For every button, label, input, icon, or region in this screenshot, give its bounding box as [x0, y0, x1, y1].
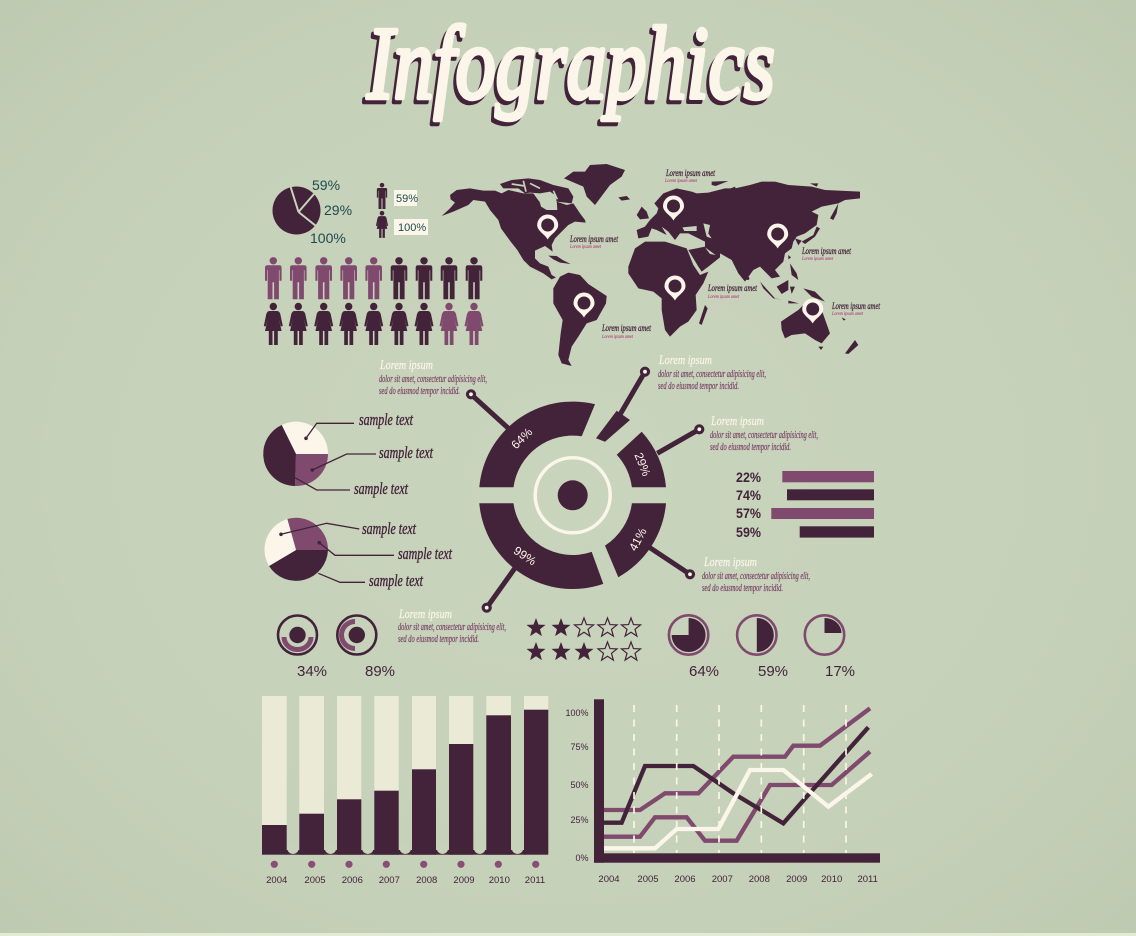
- bar values: [262, 710, 548, 855]
- callout text: top left: sed do eiusmod tempor incidid.: [379, 386, 460, 397]
- radial donut chart: 29%: [632, 451, 654, 478]
- bar year labels: 2009: [453, 875, 475, 886]
- bar year labels: 2010: [489, 875, 510, 886]
- horizontal bar chart: 57%: [736, 505, 761, 521]
- legend: man and woman percentages: [376, 183, 428, 238]
- pie chart: sample text two: sample text: [369, 571, 423, 590]
- gauge: 34%: [278, 616, 327, 680]
- gauge: 64%: 64%: [689, 663, 719, 680]
- y-axis labels: [565, 708, 588, 863]
- y-axis labels: 0%: [575, 853, 588, 863]
- gauge: 59%: 59%: [758, 663, 788, 680]
- callout text: lower left: [398, 606, 506, 645]
- bar backgrounds: [262, 696, 548, 826]
- map: americas and greenland: [442, 164, 630, 366]
- horizontal bar chart: 22%: [736, 469, 761, 485]
- x-axis year labels: 2010: [821, 874, 842, 885]
- bar dots: [271, 861, 539, 868]
- pie chart: top left with percentages: [272, 177, 352, 246]
- gauge: 34%: 34%: [297, 663, 327, 680]
- map labels: Lorem ipsum amet: [801, 246, 851, 256]
- line chart: [565, 699, 880, 885]
- bar year labels: 2005: [304, 875, 326, 886]
- y-axis labels: 75%: [570, 742, 588, 752]
- map labels: Lorem ipsum amet: [707, 283, 757, 293]
- pie chart: sample text one: sample text: [359, 410, 413, 429]
- map labels: Lorem ipsum amet: [569, 234, 618, 244]
- pointer end dots: [468, 368, 703, 611]
- donut pointers: [471, 372, 699, 608]
- y-axis labels: 25%: [570, 815, 588, 825]
- callout text: right: Lorem ipsum: [710, 413, 764, 428]
- legend: man and woman percentages: 100%: [398, 222, 426, 234]
- x-axis year labels: 2005: [637, 874, 659, 885]
- map labels: Lorem ipsum amet: [601, 334, 633, 340]
- callout text: lower right: Lorem ipsum: [703, 554, 757, 569]
- map labels: Lorem ipsum amet: [831, 301, 880, 311]
- horizontal bar chart: 59%: [736, 524, 761, 540]
- callout text: top left: Lorem ipsum: [379, 357, 433, 372]
- callout text: top centre: Lorem ipsum: [658, 352, 712, 367]
- legend: man and woman percentages: 59%: [396, 193, 418, 205]
- callout text: top left: [379, 357, 487, 397]
- x-axis year labels: 2009: [786, 874, 807, 885]
- callout text: top centre: [658, 352, 766, 392]
- y-axis labels: 100%: [565, 708, 588, 718]
- callout text: lower right: [702, 554, 810, 594]
- x-axis year labels: 2011: [857, 874, 878, 885]
- gauge: 89%: [337, 616, 395, 680]
- chart lines: [604, 708, 872, 848]
- bar year labels: 2011: [525, 875, 545, 886]
- gauge: 59%: [737, 615, 788, 680]
- bar base notches: [288, 844, 523, 854]
- x-axis year labels: 2006: [674, 874, 696, 885]
- map labels: Lorem ipsum amet: [801, 256, 833, 262]
- callout text: lower right: sed do eiusmod tempor incidid.: [702, 583, 783, 594]
- horizontal bar chart: 74%: [736, 487, 761, 503]
- radial donut chart: 41%: [626, 525, 650, 553]
- pie chart: sample text two: sample text: [362, 519, 416, 538]
- callout text: lower left: Lorem ipsum: [398, 606, 452, 621]
- callout text: lower left: dolor sit amet, consectetur adipisicing elit,: [398, 622, 506, 633]
- star rating: [526, 618, 641, 660]
- map: eurasia africa and oceania: [628, 181, 860, 354]
- callout text: top centre: sed do eiusmod tempor incidid.: [658, 381, 739, 392]
- radial donut chart: [468, 368, 703, 611]
- map labels: Lorem ipsum amet: [569, 244, 601, 250]
- callout text: top centre: dolor sit amet, consectetur adipisicing elit,: [658, 369, 766, 380]
- bar year labels: 2007: [379, 875, 400, 886]
- pictogram row: men: [265, 257, 482, 299]
- callout text: lower right: dolor sit amet, consectetur adipisicing elit,: [702, 571, 810, 582]
- bar year labels: 2008: [416, 875, 437, 886]
- world map: [442, 164, 860, 366]
- gauge: 17%: 17%: [825, 663, 855, 680]
- donut centre: [535, 458, 610, 533]
- map labels: [569, 168, 880, 340]
- pie chart: top left with percentages: 29%: [324, 202, 352, 218]
- x-axis year labels: 2008: [749, 874, 770, 885]
- pie chart: sample text two: sample text: [398, 544, 452, 563]
- pie chart: sample text two: [265, 518, 452, 590]
- donut percent labels: 64%: [508, 425, 536, 452]
- callout text: right: [710, 413, 818, 453]
- x-axis year labels: 2007: [712, 874, 733, 885]
- radial donut chart: 99%: [511, 543, 539, 568]
- chart axes: [594, 699, 880, 863]
- bar year labels: 2004: [266, 875, 287, 886]
- title: Infographics: [366, 6, 775, 121]
- gauge: 89%: 89%: [365, 663, 395, 680]
- bar year labels: [266, 875, 545, 886]
- map labels: Lorem ipsum amet: [665, 168, 715, 178]
- stacked bar chart: [262, 696, 548, 886]
- callout text: lower left: sed do eiusmod tempor incidid.: [398, 634, 479, 645]
- gauge: 64%: [669, 615, 719, 680]
- x-axis year labels: 2004: [598, 874, 620, 885]
- dashed guide lines: [634, 705, 846, 853]
- map labels: Lorem ipsum amet: [664, 178, 697, 184]
- horizontal bar chart: [736, 469, 874, 540]
- map labels: Lorem ipsum amet: [601, 323, 651, 333]
- pictogram row: women: [264, 303, 484, 345]
- pie chart: sample text one: sample text: [354, 479, 408, 498]
- pie chart: top left with percentages: 59%: [312, 177, 340, 193]
- callout text: right: dolor sit amet, consectetur adipisicing elit,: [710, 430, 818, 441]
- pie chart: top left with percentages: 100%: [310, 230, 346, 246]
- bar year labels: 2006: [342, 875, 363, 886]
- callout text: top left: dolor sit amet, consectetur adipisicing elit,: [379, 374, 487, 385]
- map labels: Lorem ipsum amet: [707, 294, 739, 300]
- map labels: Lorem ipsum amet: [831, 311, 863, 317]
- map pins: [537, 196, 823, 324]
- y-axis labels: 50%: [570, 780, 588, 790]
- gauge: 17%: [805, 615, 855, 680]
- pie chart: sample text one: sample text: [379, 443, 433, 462]
- callout text: right: sed do eiusmod tempor incidid.: [710, 442, 791, 453]
- x-axis year labels: [598, 874, 878, 885]
- pie chart: sample text one: [263, 410, 433, 498]
- donut segments: [479, 402, 666, 589]
